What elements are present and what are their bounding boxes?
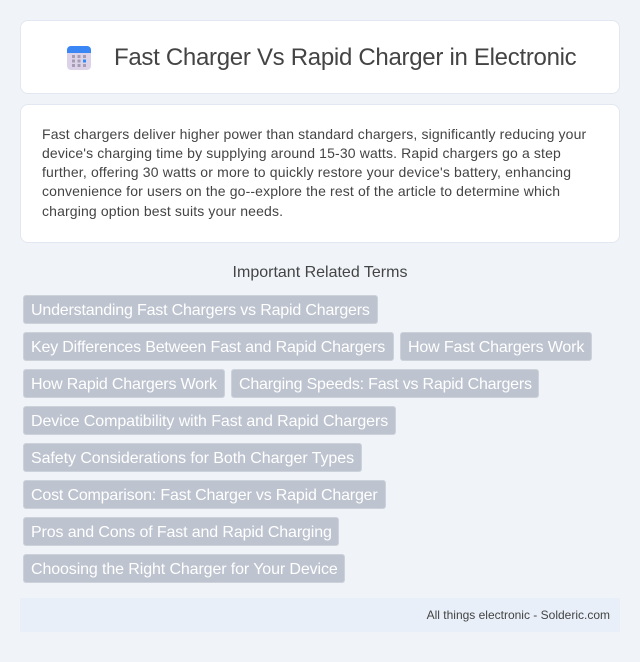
text: paragraph: charging option best suits your needs. bbox=[42, 203, 283, 219]
tag list bbox=[23, 295, 592, 583]
footer text: All things electronic - Solderic.com bbox=[427, 608, 610, 622]
tag bbox=[23, 554, 345, 583]
title: Fast Charger Vs Rapid Charger in Electronic bbox=[114, 44, 576, 71]
text: paragraph bbox=[42, 126, 586, 219]
tag bbox=[23, 295, 378, 324]
tag: Charging Speeds: Fast vs Rapid Chargers bbox=[239, 376, 532, 393]
text: paragraph: convenience for users on the go--explore the rest of the article to determine which bbox=[42, 183, 560, 199]
tag: Cost Comparison: Fast Charger vs Rapid Charger bbox=[31, 487, 378, 504]
tag: Pros and Cons of Fast and Rapid Charging bbox=[31, 524, 332, 541]
tag bbox=[23, 332, 394, 361]
icon: calendar bbox=[67, 46, 91, 70]
tag: How Fast Chargers Work bbox=[408, 339, 584, 356]
tag: Device Compatibility with Fast and Rapid Chargers bbox=[31, 413, 388, 430]
panel: header bbox=[20, 20, 620, 94]
tag: How Rapid Chargers Work bbox=[31, 376, 217, 393]
tag bbox=[23, 369, 225, 398]
tag: Choosing the Right Charger for Your Device bbox=[31, 561, 338, 578]
text: paragraph: Fast chargers deliver higher power than standard chargers, significantly reducing your bbox=[42, 126, 586, 142]
tag: Key Differences Between Fast and Rapid Chargers bbox=[31, 339, 385, 356]
text: paragraph: device's charging time by supplying around 15-30 watts. Rapid chargers go a step bbox=[42, 145, 561, 161]
tag bbox=[23, 406, 396, 435]
tag bbox=[23, 517, 339, 546]
tag: Safety Considerations for Both Charger Types bbox=[31, 450, 354, 467]
text: paragraph: further, offering 30 watts or more to quickly restore your device's battery, enhancing bbox=[42, 164, 571, 180]
tag bbox=[400, 332, 592, 361]
footer bar bbox=[20, 598, 620, 632]
tag bbox=[231, 369, 539, 398]
tag bbox=[23, 480, 386, 509]
tag: Understanding Fast Chargers vs Rapid Chargers bbox=[31, 302, 370, 319]
heading: important related terms: Important Related Terms bbox=[233, 264, 407, 281]
panel: intro text bbox=[20, 104, 620, 243]
tag bbox=[23, 443, 362, 472]
